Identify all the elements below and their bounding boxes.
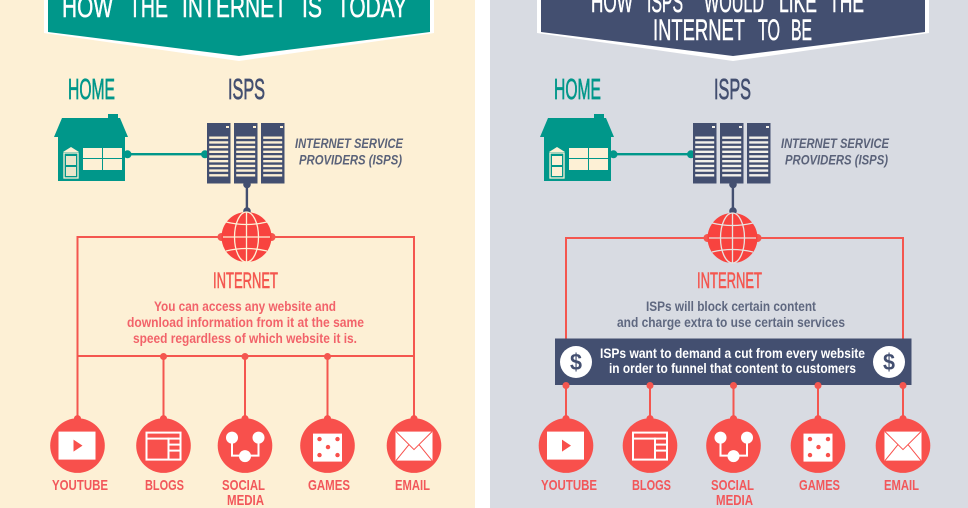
service labels (52, 477, 430, 508)
callout text (600, 345, 865, 376)
connector: isps to internet (729, 181, 737, 215)
heading: home: HOME (68, 74, 115, 106)
connector: home to isps (610, 150, 695, 158)
icon: social media (706, 415, 761, 473)
label: internet service providers: INTERNET SERVICE (781, 136, 890, 151)
connector: isps to internet (243, 181, 251, 215)
text: internet description: You can access any website and (154, 299, 336, 314)
banner: isps: TO (758, 14, 780, 47)
service labels: EMAIL (395, 477, 430, 494)
heading: isps: ISPS (714, 74, 751, 106)
service labels: SOCIAL (711, 477, 754, 494)
icon: dollar right: $ (883, 349, 895, 375)
icon: games (300, 415, 355, 473)
service labels: BLOGS (632, 477, 671, 494)
heading: internet: INTERNET (697, 268, 762, 293)
icon: house (54, 114, 128, 181)
icon: globe (218, 212, 276, 262)
banner: isps (537, 0, 929, 61)
icon: dollar left: $ (570, 349, 582, 375)
icon: youtube (539, 415, 593, 473)
heading: home: HOME (554, 74, 601, 106)
icon: globe (704, 213, 762, 263)
connector dots (562, 382, 906, 389)
banner: today (44, 0, 434, 61)
service labels: GAMES (308, 477, 350, 494)
service labels: GAMES (799, 477, 840, 494)
service labels: SOCIAL (222, 477, 265, 494)
panel: how the internet is today (0, 0, 475, 508)
icon: servers (693, 123, 770, 184)
heading: internet: INTERNET (213, 268, 278, 293)
text: internet description: download information from it at the same (127, 315, 364, 330)
icon: youtube (50, 415, 105, 473)
panel: how isps would like the internet to be (490, 0, 968, 508)
icon: blogs (136, 415, 191, 473)
callout text: ISPs want to demand a cut from every website (600, 345, 865, 361)
icon: email (387, 415, 441, 473)
service labels: YOUTUBE (541, 477, 597, 494)
text: isps description (617, 299, 845, 330)
service labels: YOUTUBE (52, 477, 108, 494)
icon: servers (207, 123, 284, 184)
connector: home to isps (124, 150, 209, 158)
callout: isps demand a cut (555, 338, 912, 385)
icon: dollar right (873, 346, 905, 378)
text: internet description (127, 299, 364, 346)
icon: house (540, 114, 614, 181)
service labels: EMAIL (884, 477, 919, 494)
icon: blogs (623, 415, 677, 473)
label: internet service providers (781, 136, 890, 168)
service labels (541, 477, 919, 508)
label: internet service providers (295, 136, 404, 168)
callout text: in order to funnel that content to customers (609, 360, 856, 376)
banner: isps: INTERNET (653, 14, 745, 47)
label: internet service providers: PROVIDERS (ISPS) (785, 152, 888, 168)
network lines (78, 237, 414, 420)
text: internet description: speed regardless of which website it is. (133, 331, 357, 346)
service labels: BLOGS (145, 477, 184, 494)
icon: social media (218, 415, 272, 473)
heading: isps: ISPS (228, 74, 265, 106)
icon: dollar left (560, 346, 592, 378)
label: internet service providers: INTERNET SERVICE (295, 136, 404, 151)
icon: email (876, 415, 930, 473)
icon: games (791, 415, 845, 473)
banner: isps: BE (791, 14, 812, 47)
text: isps description: ISPs will block certain content (646, 299, 816, 314)
label: internet service providers: PROVIDERS (ISPS) (299, 152, 402, 168)
text: isps description: and charge extra to use certain services (617, 315, 845, 330)
network lines (566, 238, 903, 420)
